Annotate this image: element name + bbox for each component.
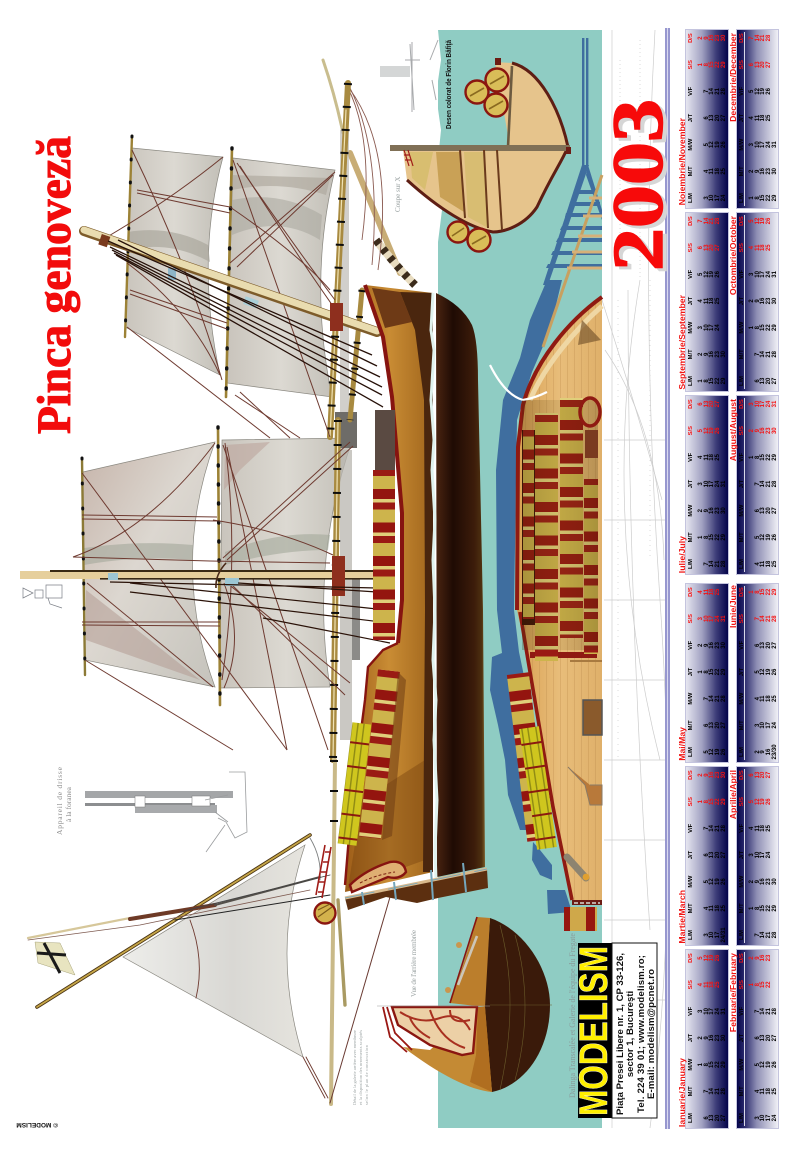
calendar: March: V/F [688, 824, 694, 833]
calendar: October: V/F [739, 270, 745, 279]
calendar: October: 2 9 16 23 30 [749, 298, 778, 304]
calendar: December [737, 30, 778, 208]
plan drawing: Appareil de drisse: Appareil de drisse [55, 766, 64, 835]
calendar: August: 7 14 21 28 [755, 481, 778, 487]
calendar: May: 5 12 19 26 [704, 749, 727, 755]
calendar: August: V/F [739, 453, 745, 462]
rigging lines [73, 150, 353, 750]
contact box: sector 1, Bucureşti [625, 991, 636, 1077]
calendar: November: J/T [688, 114, 694, 122]
calendar: July: 7 14 21 28 [704, 561, 727, 567]
deck plan [517, 297, 602, 905]
calendar: January: D/S [688, 953, 694, 963]
midship cross-section [390, 58, 571, 232]
label: December: Decembrie/December [728, 33, 738, 122]
calendar: December: 4 11 18 25 [749, 115, 772, 121]
calendar: November: S/S [688, 60, 694, 69]
calendar: April: D/S [739, 770, 745, 780]
calendar: May: 4 11 18 25 [698, 589, 721, 595]
faint captions: Vue de l'arrière membrée [410, 930, 418, 997]
label: June: Iunie/June [728, 585, 738, 628]
MODELISM logo: MODELISM [572, 946, 616, 1116]
calendar: November: 7 14 21 28 [704, 88, 727, 95]
calendar: July: D/S [688, 399, 694, 409]
calendar: October: 5 12 19 26 [749, 218, 772, 224]
label: April: Aprilie/April [728, 770, 738, 819]
masts [330, 83, 362, 1104]
calendar: May [686, 584, 728, 762]
calendar: June [737, 584, 778, 762]
calendar: October [737, 213, 778, 391]
calendar: October: S/S [739, 243, 745, 252]
calendar: March: M/W [688, 876, 694, 888]
calendar: September: J/T [688, 297, 694, 305]
main yards [82, 427, 220, 705]
calendar: May: 6 13 20 27 [704, 722, 727, 729]
calendar: August [737, 396, 778, 574]
calendar: November: M/W [688, 139, 694, 151]
faint line drawing background [602, 30, 668, 1128]
double lavender rule [665, 28, 670, 1129]
calendar: June: S/S [739, 614, 745, 623]
calendar: October: J/T [739, 297, 745, 305]
calendar: April: J/T [739, 851, 745, 859]
hull planked side [345, 285, 433, 892]
calendar: August: 6 13 20 27 [755, 507, 778, 514]
aft yards [125, 136, 232, 397]
calendar: July [686, 396, 728, 574]
calendar: September: 1 8 15 22 29 [698, 378, 727, 384]
calendar: June: M/W [739, 693, 745, 705]
calendar: April: 4 11 18 25 [749, 825, 772, 832]
calendar: March: 1 8 15 22 29 [698, 798, 727, 805]
calendar: December: L/M [739, 193, 745, 203]
contact box [612, 943, 657, 1118]
calendar: January: 4 11 18 25 [698, 981, 721, 988]
calendar: August: S/S [739, 426, 745, 435]
calendar: March: M/T [688, 903, 694, 913]
calendar: September [686, 213, 728, 391]
calendar: June: 3 10 17 24 [755, 722, 778, 729]
calendar: July: M/T [688, 532, 694, 542]
calendar: July: V/F [688, 453, 694, 462]
calendar: May: 3 10 17 24 31 [698, 615, 727, 622]
calendar: November: 6 13 20 27 [704, 115, 727, 121]
calendar: February: 4 11 18 25 [755, 1088, 778, 1095]
calendar: June: 7 14 21 28 [755, 615, 778, 622]
calendar: February: 6 13 20 27 [755, 1035, 778, 1041]
calendar: February: 3 10 17 24 [755, 1115, 778, 1121]
calendar: July: 2 9 16 23 30 [698, 507, 727, 514]
calendar: February: 5 12 19 26 [755, 1061, 778, 1068]
calendar: February: V/F [739, 1007, 745, 1016]
faint captions: Coupe sur X [394, 177, 402, 212]
hull dark wale band [400, 292, 433, 872]
calendar: May: D/S [688, 587, 694, 597]
calendar: January: 6 13 20 27 [704, 1115, 727, 1121]
calendar: October: 6 13 20 27 [755, 378, 778, 384]
weathered mast shading [335, 130, 360, 740]
title: Pinca genoveză: Pinca genoveză [28, 136, 81, 434]
calendar: December: V/F [739, 87, 745, 96]
calendar: August: 3 10 17 24 31 [749, 401, 778, 407]
barrels of the cross-section [448, 68, 508, 252]
calendar: August: 4 11 18 25 [755, 561, 778, 567]
plan drawing: Appareil de drisse: à la foranea [64, 786, 73, 822]
deck end barrel [564, 907, 597, 931]
bowsprit on deck [490, 175, 602, 400]
calendar: October: M/T [739, 349, 745, 359]
teal background band [438, 30, 602, 1128]
small mast detail drawing [23, 585, 62, 608]
hull lower shading [348, 760, 425, 888]
calendar: December: S/S [739, 60, 745, 69]
calendar: September: L/M [688, 376, 694, 386]
calendar: November: V/F [688, 87, 694, 96]
calendar: November: 2 9 16 23 30 [698, 35, 727, 41]
hull upper beams [372, 288, 412, 328]
calendar: July: J/T [688, 480, 694, 488]
calendar: April: 7 14 21 28 [755, 932, 778, 938]
contact box: Tel. 224 39 01; www.modelism.ro; [636, 955, 647, 1113]
hull underwater part [436, 293, 485, 877]
calendar: April: S/S [739, 797, 745, 806]
calendar: January: 3 10 17 24 31 [698, 1008, 727, 1015]
label: January: Ianuarie/January [677, 1058, 687, 1127]
calendar: January: 7 14 21 28 [704, 1088, 727, 1095]
sails of the main mast [83, 438, 353, 688]
heavy shrouds of the aft mast [108, 240, 383, 407]
calendar: July: L/M [688, 559, 694, 569]
calendar: February: M/W [739, 1059, 745, 1071]
calendar: December: 2 9 16 23 30 [749, 168, 778, 175]
upper spar striped [323, 60, 415, 285]
calendar: May: 2 9 16 23 30 [698, 642, 727, 649]
calendar: October: 1 8 15 22 29 [749, 324, 778, 331]
foresail rigging and yard [28, 835, 390, 1103]
calendar: December: 3 10 17 24 31 [749, 141, 778, 148]
calendar: February: L/M [739, 1113, 745, 1123]
calendar: August: 2 9 16 23 30 [749, 427, 778, 434]
faint captions: Dalinga Transcalée et Galerie de l'équipe du Fregate [568, 933, 577, 1098]
label: February: Februarie/February [728, 953, 738, 1032]
calendar: January: V/F [688, 1007, 694, 1016]
red ladder and end barrel [314, 845, 336, 924]
calendar: February: 7 14 21 28 [755, 1008, 778, 1015]
calendar: December: 5 12 19 26 [749, 88, 772, 95]
calendar: November: 5 12 19 26 [704, 141, 727, 148]
calendar: September: 2 9 16 23 30 [698, 351, 727, 358]
calendar: January: 5 12 19 26 [698, 955, 721, 961]
calendar: April: 5 12 19 26 [749, 798, 772, 805]
calendar: January: L/M [688, 1113, 694, 1123]
calendar: April: 1 8 15 22 29 [749, 905, 778, 912]
calendar: June: J/T [739, 668, 745, 676]
label: May: Mai/May [677, 727, 687, 761]
calendar: October: 4 11 18 25 [749, 244, 772, 251]
torn teal edge [430, 30, 442, 1128]
calendar: August: M/T [739, 532, 745, 542]
main mast spar and stays [20, 556, 390, 643]
faint captions: selon le plan de construction [364, 1044, 369, 1105]
calendar: May: M/W [688, 693, 694, 705]
stern view [377, 917, 552, 1092]
calendar: March: 4 11 18 25 [704, 905, 727, 912]
faint captions: Détail de la galerie arrière avec membrure [352, 1030, 357, 1105]
calendar: December: D/S [739, 33, 745, 43]
calendar: July: 5 12 19 26 [698, 427, 721, 434]
calendar: February [737, 950, 778, 1128]
calendar: May: M/T [688, 720, 694, 730]
calendar: September: 4 11 18 25 [698, 298, 721, 304]
calendar: September: M/T [688, 349, 694, 359]
calendar: June: 4 11 18 25 [755, 695, 778, 702]
calendar: September: 3 10 17 24 [698, 324, 721, 331]
calendar: September: 6 13 20 27 [698, 244, 721, 251]
calendar: August: D/S [739, 399, 745, 409]
calendar: February: S/S [739, 980, 745, 989]
calendar: June: 1 8 15 22 29 [749, 589, 778, 595]
label: July: Iulie/July [677, 536, 687, 573]
label: August: August/August [728, 399, 738, 461]
calendar: April: M/T [739, 903, 745, 913]
calendar: September: V/F [688, 270, 694, 279]
calendar: December: M/W [739, 139, 745, 151]
calendar: July: 1 8 15 22 29 [698, 534, 727, 541]
calendar: June: 5 12 19 26 [755, 669, 778, 675]
calendar: March: J/T [688, 851, 694, 859]
top plan sketch [380, 40, 438, 112]
calendar: March: 2 9 16 23 30 [698, 772, 727, 778]
calendar: May: S/S [688, 614, 694, 623]
calendar: January: M/W [688, 1059, 694, 1071]
calendar: July: M/W [688, 505, 694, 517]
calendar: November: 1 8 15 22 29 [698, 61, 727, 68]
calendar: December: M/T [739, 166, 745, 176]
barrel stacks on deck [507, 398, 600, 850]
calendar: August: J/T [739, 480, 745, 488]
calendar: March: 7 14 21 28 [704, 825, 727, 832]
caption: coloured by: Desen colorat de Florin Băfiţă [444, 39, 453, 129]
calendar: April: 2 9 16 23 30 [749, 878, 778, 885]
calendar: October: 3 10 17 24 31 [749, 271, 778, 278]
calendar: July: 4 11 18 25 [698, 454, 721, 461]
calendar: October: M/W [739, 322, 745, 334]
year 2003: 2003 [598, 99, 678, 271]
calendar: August: 1 8 15 22 29 [749, 454, 778, 461]
calendar: January [686, 950, 728, 1128]
calendar: February: 1 8 15 22 [749, 981, 772, 988]
calendar: June: 6 13 20 27 [755, 642, 778, 649]
calendar: August: M/W [739, 505, 745, 517]
hull scroll ornament [350, 862, 406, 892]
calendar: May: 1 8 15 22 29 [698, 669, 727, 675]
calendar: April: L/M [739, 930, 745, 940]
calendar: April: 3 10 17 24 [749, 852, 772, 858]
faint captions: et la disposition des ornements sculptés [358, 1030, 363, 1105]
calendar: November [686, 30, 728, 208]
faint captions [352, 177, 577, 1105]
flag with black cross [35, 942, 75, 975]
calendar: December: J/T [739, 114, 745, 122]
calendar: November: 3 10 17 24 [704, 195, 727, 201]
calendar: March: 6 13 20 27 [704, 852, 727, 858]
calendar: April [737, 767, 778, 945]
calendar: March: L/M [688, 930, 694, 940]
year 2003: 2003 [602, 102, 682, 274]
calendar: June: M/T [739, 720, 745, 730]
calendar: February: 2 9 16 23 [749, 955, 772, 961]
hull stern beam with clamps [345, 863, 488, 910]
calendar: October: L/M [739, 376, 745, 386]
foresail lateen sail [123, 845, 305, 1057]
copyright: © MODELISM [16, 1121, 58, 1129]
sails of the aft mast [125, 148, 335, 397]
calendar: January: M/T [688, 1086, 694, 1096]
calendar: January: 2 9 16 23 30 [698, 1035, 727, 1041]
calendar: March: D/S [688, 770, 694, 780]
gunwale [365, 285, 402, 643]
calendar: May: J/T [688, 668, 694, 676]
boom of the aft mast [84, 230, 377, 332]
calendar: March: 3 10 17 24/31 [704, 927, 727, 942]
calendar: January: 1 8 15 22 29 [698, 1061, 727, 1068]
calendar: January: S/S [688, 980, 694, 989]
calendar: July: 6 13 20 27 [698, 401, 721, 407]
calendar: September: D/S [688, 216, 694, 226]
calendar: August: 5 12 19 26 [755, 534, 778, 541]
calendar: June: D/S [739, 587, 745, 597]
calendar: December: 6 13 20 27 [749, 61, 772, 68]
calendar: November: M/T [688, 166, 694, 176]
calendar: January: J/T [688, 1034, 694, 1042]
calendar: May: L/M [688, 747, 694, 757]
torn paper strip [431, 293, 437, 880]
calendar: June: L/M [739, 747, 745, 757]
calendar: September: S/S [688, 243, 694, 252]
calendar: July: 3 10 17 24 31 [698, 481, 727, 487]
calendar: February: M/T [739, 1086, 745, 1096]
calendar: March [686, 767, 728, 945]
label: March: Martie/March [677, 890, 687, 944]
calendar: October: D/S [739, 216, 745, 226]
calendar: September: 7 14 21 28 [698, 218, 721, 224]
calendar: February: D/S [739, 953, 745, 963]
label: September: Septembrie/September [677, 295, 687, 390]
label: October: Octombrie/October [728, 216, 738, 295]
calendar: December: 1 8 15 22 29 [749, 195, 778, 201]
calendar: July: S/S [688, 426, 694, 435]
calendar: December: 7 14 21 28 [749, 35, 772, 41]
calendar: November: L/M [688, 193, 694, 203]
calendar: September: 5 12 19 26 [698, 271, 721, 278]
calendar: April: V/F [739, 824, 745, 833]
calendar: October: 7 14 21 28 [755, 351, 778, 358]
calendar: May: 7 14 21 28 [704, 695, 727, 702]
calendar: June: V/F [739, 641, 745, 650]
barrels on hull [338, 410, 406, 846]
contact box: Piaţa Presei Libere nr. 1, CP 33-126, [615, 953, 626, 1115]
calendar: February: J/T [739, 1034, 745, 1042]
deck shadow on water [490, 38, 602, 914]
contact box: E-mail: modelism@pcnet.ro [646, 969, 657, 1099]
calendar: March: 5 12 19 26 [704, 878, 727, 885]
calendar: March: S/S [688, 797, 694, 806]
calendar: August: L/M [739, 559, 745, 569]
plan drawing: Appareil de drisse [55, 766, 247, 852]
calendar: April: M/W [739, 876, 745, 888]
calendar: June: 2 9 16 23/30 [755, 744, 778, 759]
calendar: November: 4 11 18 25 [704, 168, 727, 175]
calendar: April: 6 13 20 27 [749, 772, 772, 778]
calendar: May: V/F [688, 641, 694, 650]
label: November: Noiembrie/November [677, 118, 687, 205]
calendar: November: D/S [688, 33, 694, 43]
calendar: September: M/W [688, 322, 694, 334]
